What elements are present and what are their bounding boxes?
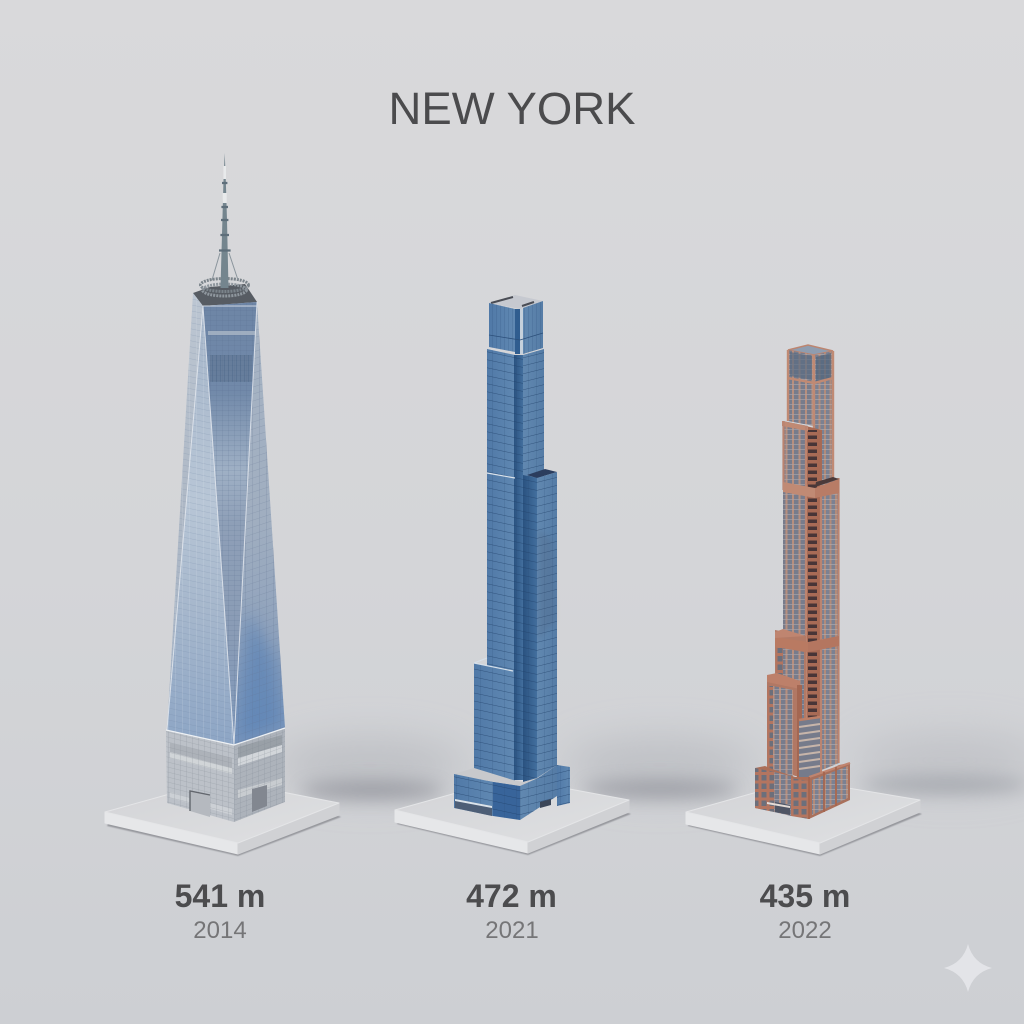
tower 3: 111 West 57th Street, 435 m [686, 345, 922, 856]
label: 541 m: 541 m [175, 878, 265, 914]
antenna spire [212, 153, 238, 288]
floor shadows [275, 734, 1024, 798]
label: 2021: 2021 [485, 917, 539, 944]
title: NEW YORK [389, 83, 635, 134]
icon: sparkle [944, 944, 992, 992]
label: 2022: 2022 [778, 917, 832, 944]
plinth 1 [105, 780, 341, 856]
concrete base [166, 728, 285, 822]
plinth 2 [395, 778, 631, 855]
rooftop ring [200, 278, 248, 296]
glass tower [454, 295, 570, 820]
glass shaft [167, 293, 285, 745]
tower 2: Central Park Tower, 472 m [395, 295, 631, 855]
terracotta tower [755, 345, 850, 819]
tower 1: One World Trade Center, 541 m [105, 153, 341, 856]
label: 2014: 2014 [193, 917, 247, 944]
label: 472 m: 472 m [466, 878, 557, 914]
rooftop deck [193, 284, 257, 306]
label: 435 m: 435 m [760, 878, 850, 914]
plinth 3 [686, 780, 922, 856]
